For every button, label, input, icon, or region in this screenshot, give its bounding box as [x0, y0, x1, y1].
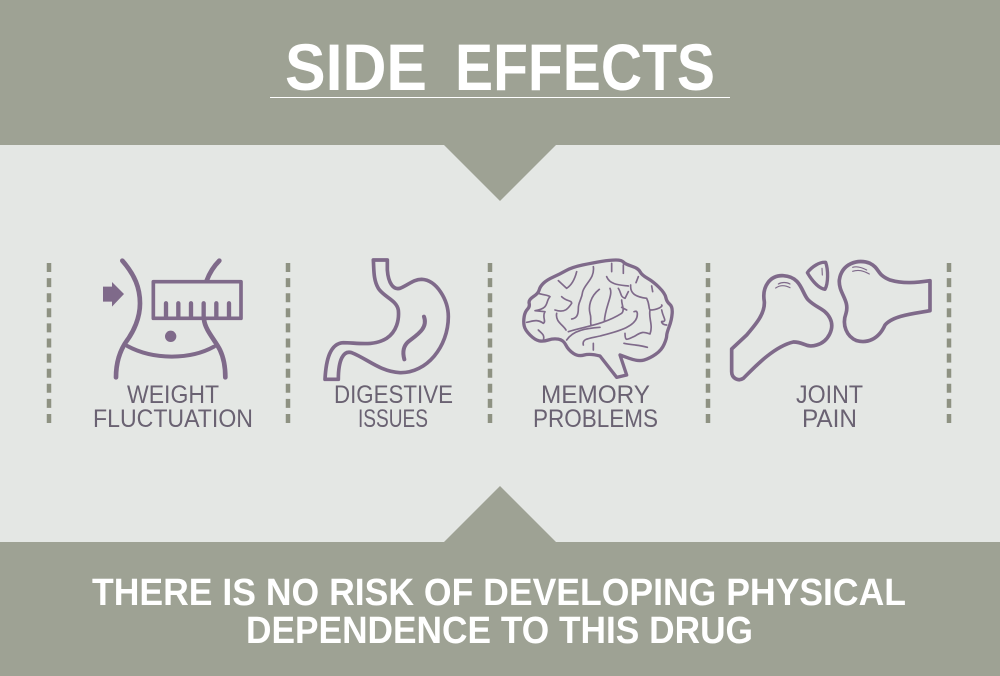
icon: stomach	[325, 260, 448, 379]
title: SIDE	[285, 30, 427, 104]
label: weight fluctuation	[93, 381, 253, 433]
label: joint pain: JOINT	[796, 381, 863, 409]
label: memory problems	[533, 381, 658, 433]
footer message: THERE IS NO RISK OF DEVELOPING PHYSICAL	[92, 572, 906, 614]
title: EFFECTS	[455, 30, 715, 104]
label: digestive issues: DIGESTIVE	[334, 381, 453, 409]
footer message: DEPENDENCE TO THIS DRUG	[246, 610, 753, 652]
label: weight fluctuation: WEIGHT	[127, 381, 219, 409]
label: weight fluctuation: FLUCTUATION	[93, 405, 253, 433]
footer message	[92, 572, 906, 652]
header band	[0, 0, 1000, 201]
label: memory problems: MEMORY	[541, 381, 650, 409]
icon: brain	[524, 260, 672, 377]
label: joint pain: PAIN	[802, 405, 857, 433]
footer band	[0, 486, 1000, 676]
title	[270, 30, 730, 104]
label: joint pain	[796, 381, 863, 433]
icon: waist with measuring tape	[103, 261, 241, 377]
label: digestive issues: ISSUES	[358, 405, 428, 433]
label: memory problems: PROBLEMS	[533, 405, 658, 433]
label: digestive issues	[334, 381, 453, 433]
icon: knee joint bones	[732, 261, 930, 380]
